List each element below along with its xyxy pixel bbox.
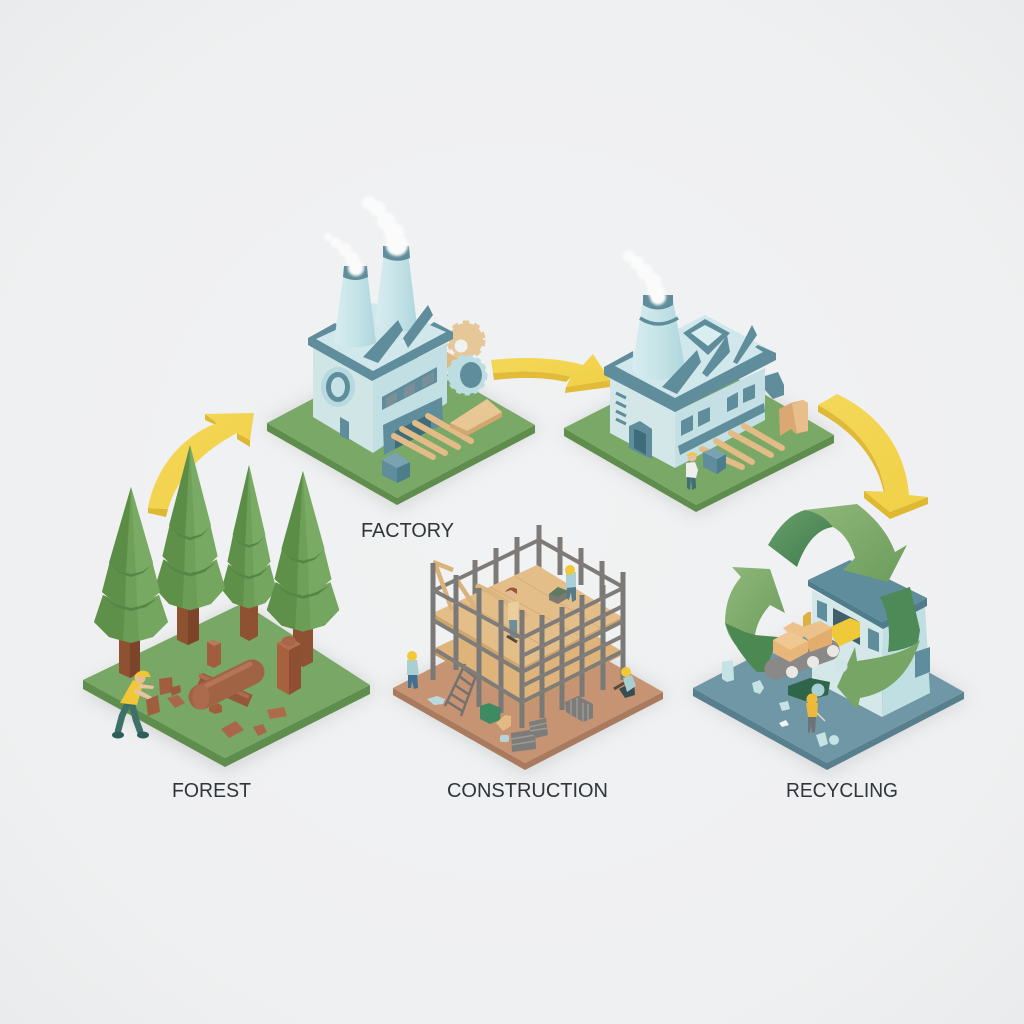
upper floor — [433, 565, 622, 674]
green arrow: right — [837, 587, 920, 710]
tree 4 — [267, 471, 339, 632]
metal stacks — [511, 696, 593, 752]
window strip — [382, 367, 437, 410]
roof light — [683, 319, 730, 355]
side panels — [915, 647, 930, 678]
loading bay — [383, 397, 443, 455]
timber truss — [433, 562, 478, 612]
stacked lumber — [450, 399, 502, 436]
worker — [806, 694, 825, 733]
wooden planks — [394, 416, 471, 457]
panel: factory — [262, 196, 542, 510]
back-wall windows — [817, 600, 879, 652]
green arrow: left — [725, 567, 785, 672]
teal gear — [448, 356, 486, 394]
worker left — [407, 651, 419, 689]
left chimney cap — [343, 266, 368, 280]
factory right wall — [373, 343, 447, 453]
rubble — [722, 660, 848, 747]
back posts and rails — [435, 525, 623, 600]
label: forest: FOREST — [172, 780, 251, 802]
wood chips — [159, 677, 287, 738]
construction base — [388, 617, 670, 775]
tree 2 — [155, 445, 225, 610]
label: recycling: RECYCLING — [786, 780, 898, 802]
recycling building walls — [812, 590, 930, 717]
tree 3 — [222, 465, 276, 609]
smoke — [623, 250, 666, 305]
green cube — [480, 703, 501, 724]
saw-tooth skylights — [662, 325, 757, 394]
smoke — [324, 196, 408, 276]
left wall gear — [321, 367, 355, 407]
entrance — [629, 421, 652, 459]
stump — [207, 640, 221, 668]
deck worker carrying beam — [505, 587, 519, 642]
wood gear — [447, 323, 483, 372]
yellow arrow: mill to recycling — [818, 394, 928, 519]
panel: forest — [80, 445, 378, 772]
woodcutter — [112, 671, 160, 738]
right chimney — [375, 252, 417, 333]
factory left wall — [313, 347, 373, 453]
side unit — [765, 372, 784, 399]
yellow arrow: factory to mill — [491, 354, 610, 393]
green arrow: top — [768, 504, 907, 582]
right chimney cap — [383, 246, 410, 261]
ladder — [445, 664, 477, 716]
roof — [604, 315, 776, 412]
worker — [686, 452, 698, 490]
dark green box — [788, 678, 830, 701]
mill right wall — [675, 368, 765, 468]
forest base — [80, 603, 378, 772]
yellow arrow: forest to factory — [148, 413, 254, 517]
sack and bucket — [496, 715, 511, 742]
wood stack — [779, 400, 808, 436]
mill base — [560, 358, 840, 516]
awning — [678, 403, 765, 455]
crate — [703, 448, 726, 474]
tall cut block — [277, 636, 301, 695]
timber beam — [476, 585, 527, 616]
left chimney — [334, 270, 376, 347]
label: factory: FACTORY — [361, 520, 454, 542]
windows — [681, 384, 755, 436]
vent slats — [616, 393, 626, 424]
tree trunks — [119, 600, 313, 678]
panel: mill — [560, 250, 840, 516]
label: construction: CONSTRUCTION — [447, 780, 608, 802]
worker crouching right — [614, 667, 636, 698]
recycling base — [688, 617, 970, 775]
saw-tooth skylights — [363, 305, 433, 363]
panel: recycling — [688, 504, 970, 775]
conveyor with boxes — [773, 612, 860, 678]
front posts — [433, 563, 623, 728]
light debris — [427, 696, 445, 705]
side door — [340, 417, 349, 440]
factory base — [262, 350, 542, 510]
lower floor — [435, 600, 620, 706]
planks from the mill — [702, 426, 782, 467]
mill left wall — [610, 373, 675, 468]
roof — [308, 303, 453, 381]
tree 1 — [94, 487, 168, 643]
teal crate — [382, 452, 410, 483]
stone block on deck — [549, 587, 568, 604]
logs on the ground — [192, 664, 252, 714]
mill chimney — [632, 295, 685, 380]
panel: construction — [388, 525, 670, 775]
front rails — [433, 588, 623, 702]
deck worker standing — [565, 565, 576, 602]
recycling roof — [808, 560, 927, 629]
